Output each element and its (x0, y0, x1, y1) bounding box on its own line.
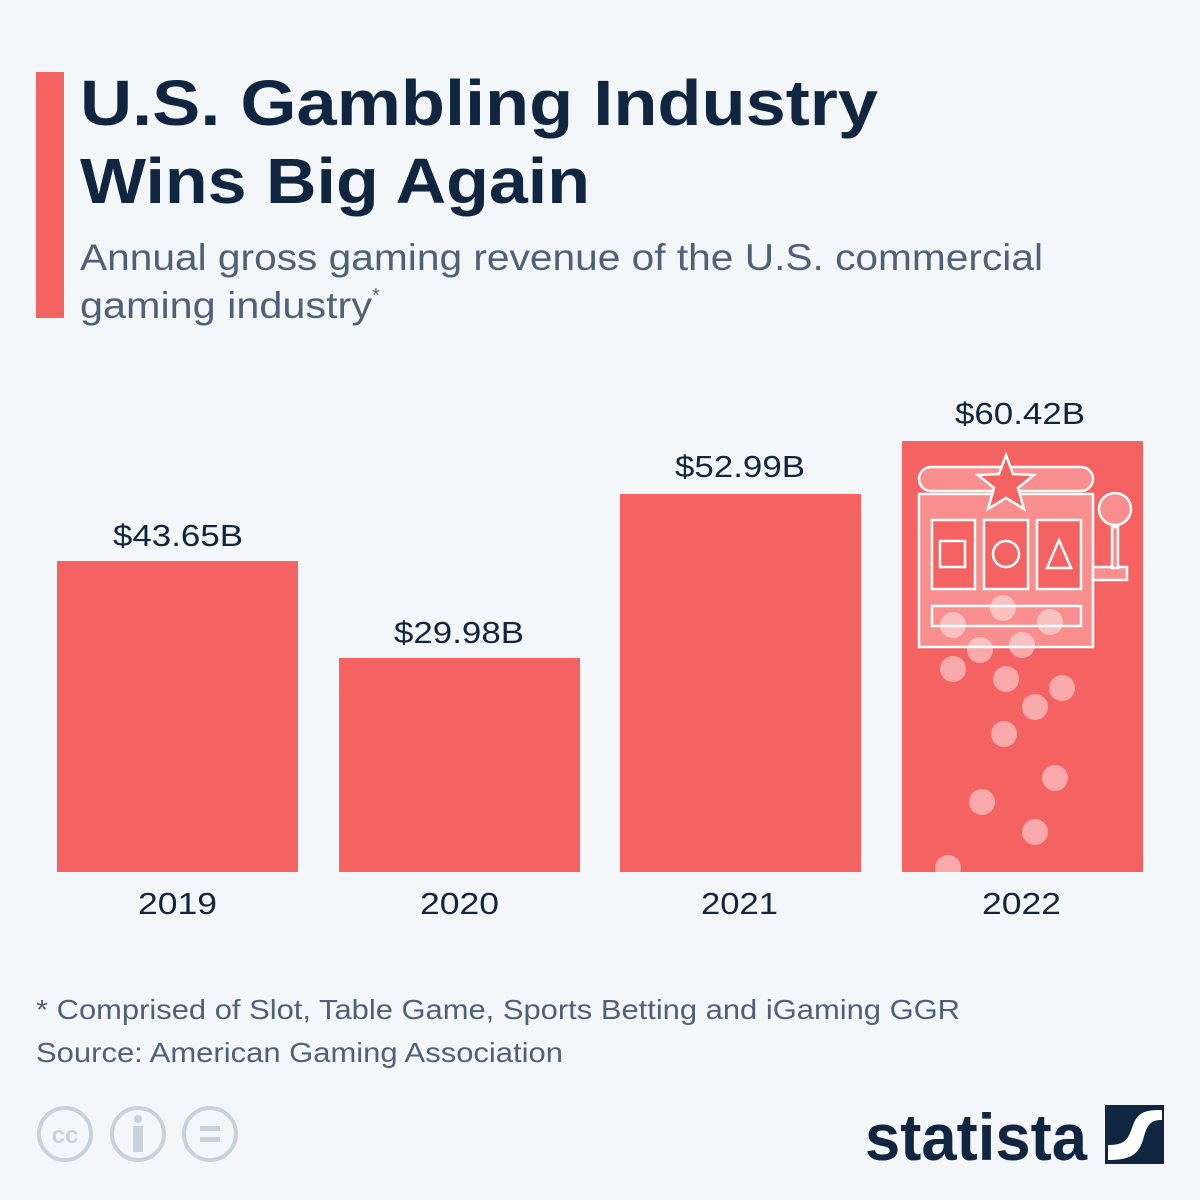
accent bar (36, 72, 64, 318)
subtitle: Annual gross gaming revenue of the U.S. commercial (80, 237, 1043, 278)
footnote (36, 994, 960, 1068)
title (80, 67, 878, 217)
title: Wins Big Again (80, 145, 590, 217)
bar chart (57, 396, 1143, 921)
bar chart: $60.42B (955, 396, 1085, 431)
bar chart: $29.98B (394, 615, 524, 650)
logo: statista: statista (865, 1100, 1088, 1174)
bar chart: $43.65B (113, 518, 243, 553)
icon: slot machine (919, 455, 1131, 881)
icons: licence (39, 1108, 236, 1160)
icons: licence: cc (52, 1122, 78, 1149)
bar chart: 2021 (701, 886, 778, 921)
footnote: Source: American Gaming Association (36, 1037, 563, 1068)
bar chart: $52.99B (675, 449, 805, 484)
subtitle: * (372, 285, 380, 307)
subtitle (80, 237, 1043, 326)
footnote: * Comprised of Slot, Table Game, Sports Betting and iGaming GGR (36, 994, 960, 1025)
bar chart: 2019 (138, 886, 217, 921)
subtitle: gaming industry (80, 285, 373, 326)
title: U.S. Gambling Industry (80, 67, 878, 139)
bar chart: 2020 (420, 886, 499, 921)
bar chart: 2022 (982, 886, 1061, 921)
